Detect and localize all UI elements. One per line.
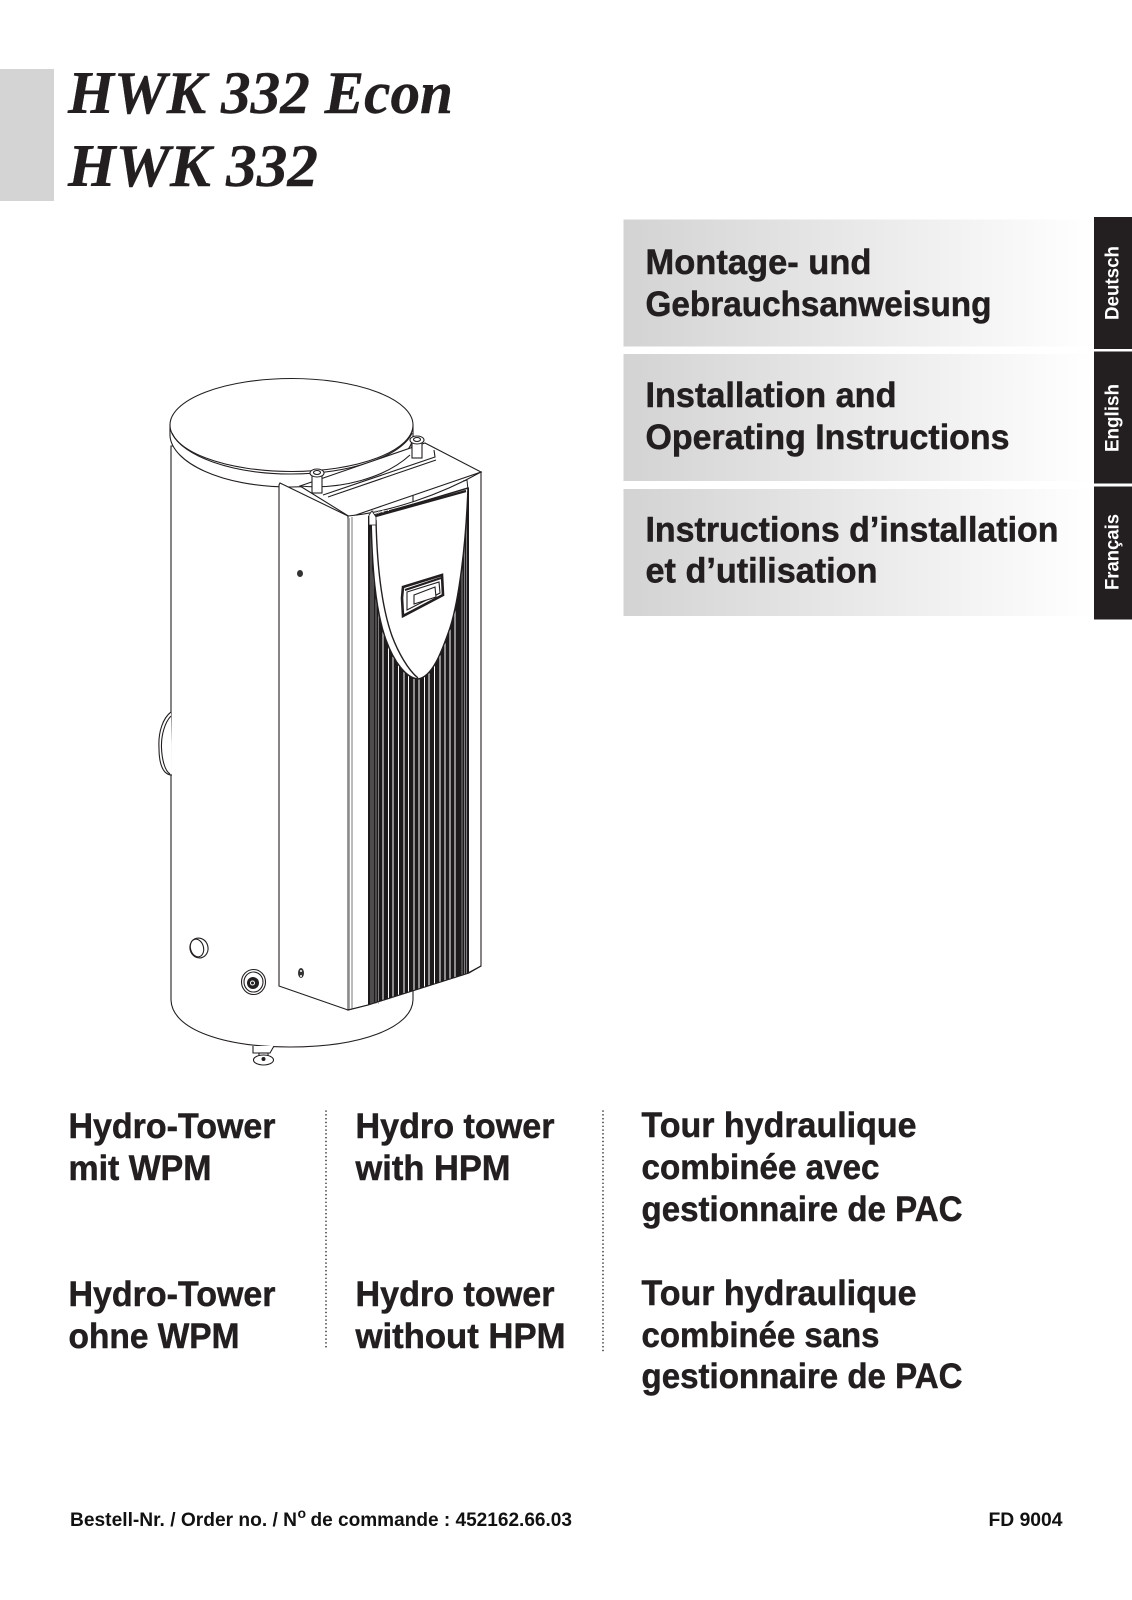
product names: German: Hydro-Tower [68, 1275, 276, 1314]
order number: de commande : 452162.66.03 [310, 1510, 572, 1531]
grey title marker block [0, 69, 54, 201]
product names: English: Hydro tower [356, 1275, 555, 1314]
product names: German: mit WPM [68, 1149, 212, 1188]
product names: French [642, 1106, 962, 1396]
panel: French instructions: Instructions d’installation [646, 510, 1058, 550]
front cover dome [369, 480, 468, 679]
housing front [348, 472, 481, 1010]
product names: French: combinée sans [642, 1316, 880, 1355]
dotted divider left [325, 1111, 327, 1347]
panel: French instructions: et d’utilisation [646, 552, 878, 590]
panel: German instructions: Gebrauchsanweisung [646, 285, 992, 324]
panel: English instructions: Installation and [646, 376, 896, 415]
illustration: hydro tower [159, 378, 481, 1065]
panel: English instructions [624, 354, 1094, 481]
housing screws [297, 570, 304, 978]
order number: Bestell-Nr. / Order no. / N [70, 1510, 297, 1531]
fins [348, 488, 481, 1010]
product names: English [355, 1107, 566, 1356]
product names: German: Hydro-Tower [68, 1107, 276, 1146]
product names: French: gestionnaire de PAC [642, 1190, 962, 1229]
language tab: Français: Français [1102, 514, 1124, 590]
control display [402, 575, 443, 616]
product names: German: ohne WPM [68, 1317, 240, 1356]
product names: French: gestionnaire de PAC [642, 1357, 962, 1396]
connection bolts [310, 436, 424, 493]
product names: English: Hydro tower [356, 1107, 555, 1146]
language tab: English [1094, 352, 1132, 484]
cylinder body [171, 446, 413, 1047]
foot [253, 1046, 274, 1065]
top connection channel and back of housing [300, 443, 481, 517]
dotted divider right [602, 1111, 604, 1352]
drain fitting [242, 970, 266, 994]
language tab: English: English [1102, 384, 1124, 452]
product names: French: Tour hydraulique [642, 1274, 916, 1313]
product names: French: combinée avec [642, 1148, 880, 1187]
title: HWK 332 Econ [67, 60, 453, 126]
lid rim [170, 425, 413, 487]
housing side panel [279, 483, 348, 1010]
panel: English instructions: Operating Instructions [646, 418, 1010, 457]
bottom nozzle [188, 936, 210, 960]
product names: French: Tour hydraulique [642, 1106, 916, 1145]
title: HWK 332 [67, 133, 318, 199]
language tab: Français [1094, 486, 1132, 620]
left side bulge [159, 712, 172, 775]
panel: German instructions [624, 220, 1094, 346]
product names: German [68, 1107, 276, 1356]
title [67, 60, 453, 199]
panel: French instructions [624, 489, 1094, 616]
language tab: Deutsch [1094, 217, 1132, 349]
order number [70, 1505, 572, 1531]
document code: FD 9004 [988, 1510, 1063, 1531]
product names: English: without HPM [355, 1317, 566, 1356]
panel: German instructions: Montage- und [646, 243, 872, 282]
language tab: Deutsch: Deutsch [1102, 246, 1124, 320]
product names: English: with HPM [355, 1149, 510, 1188]
lid [170, 378, 413, 472]
order number: o [298, 1505, 306, 1521]
